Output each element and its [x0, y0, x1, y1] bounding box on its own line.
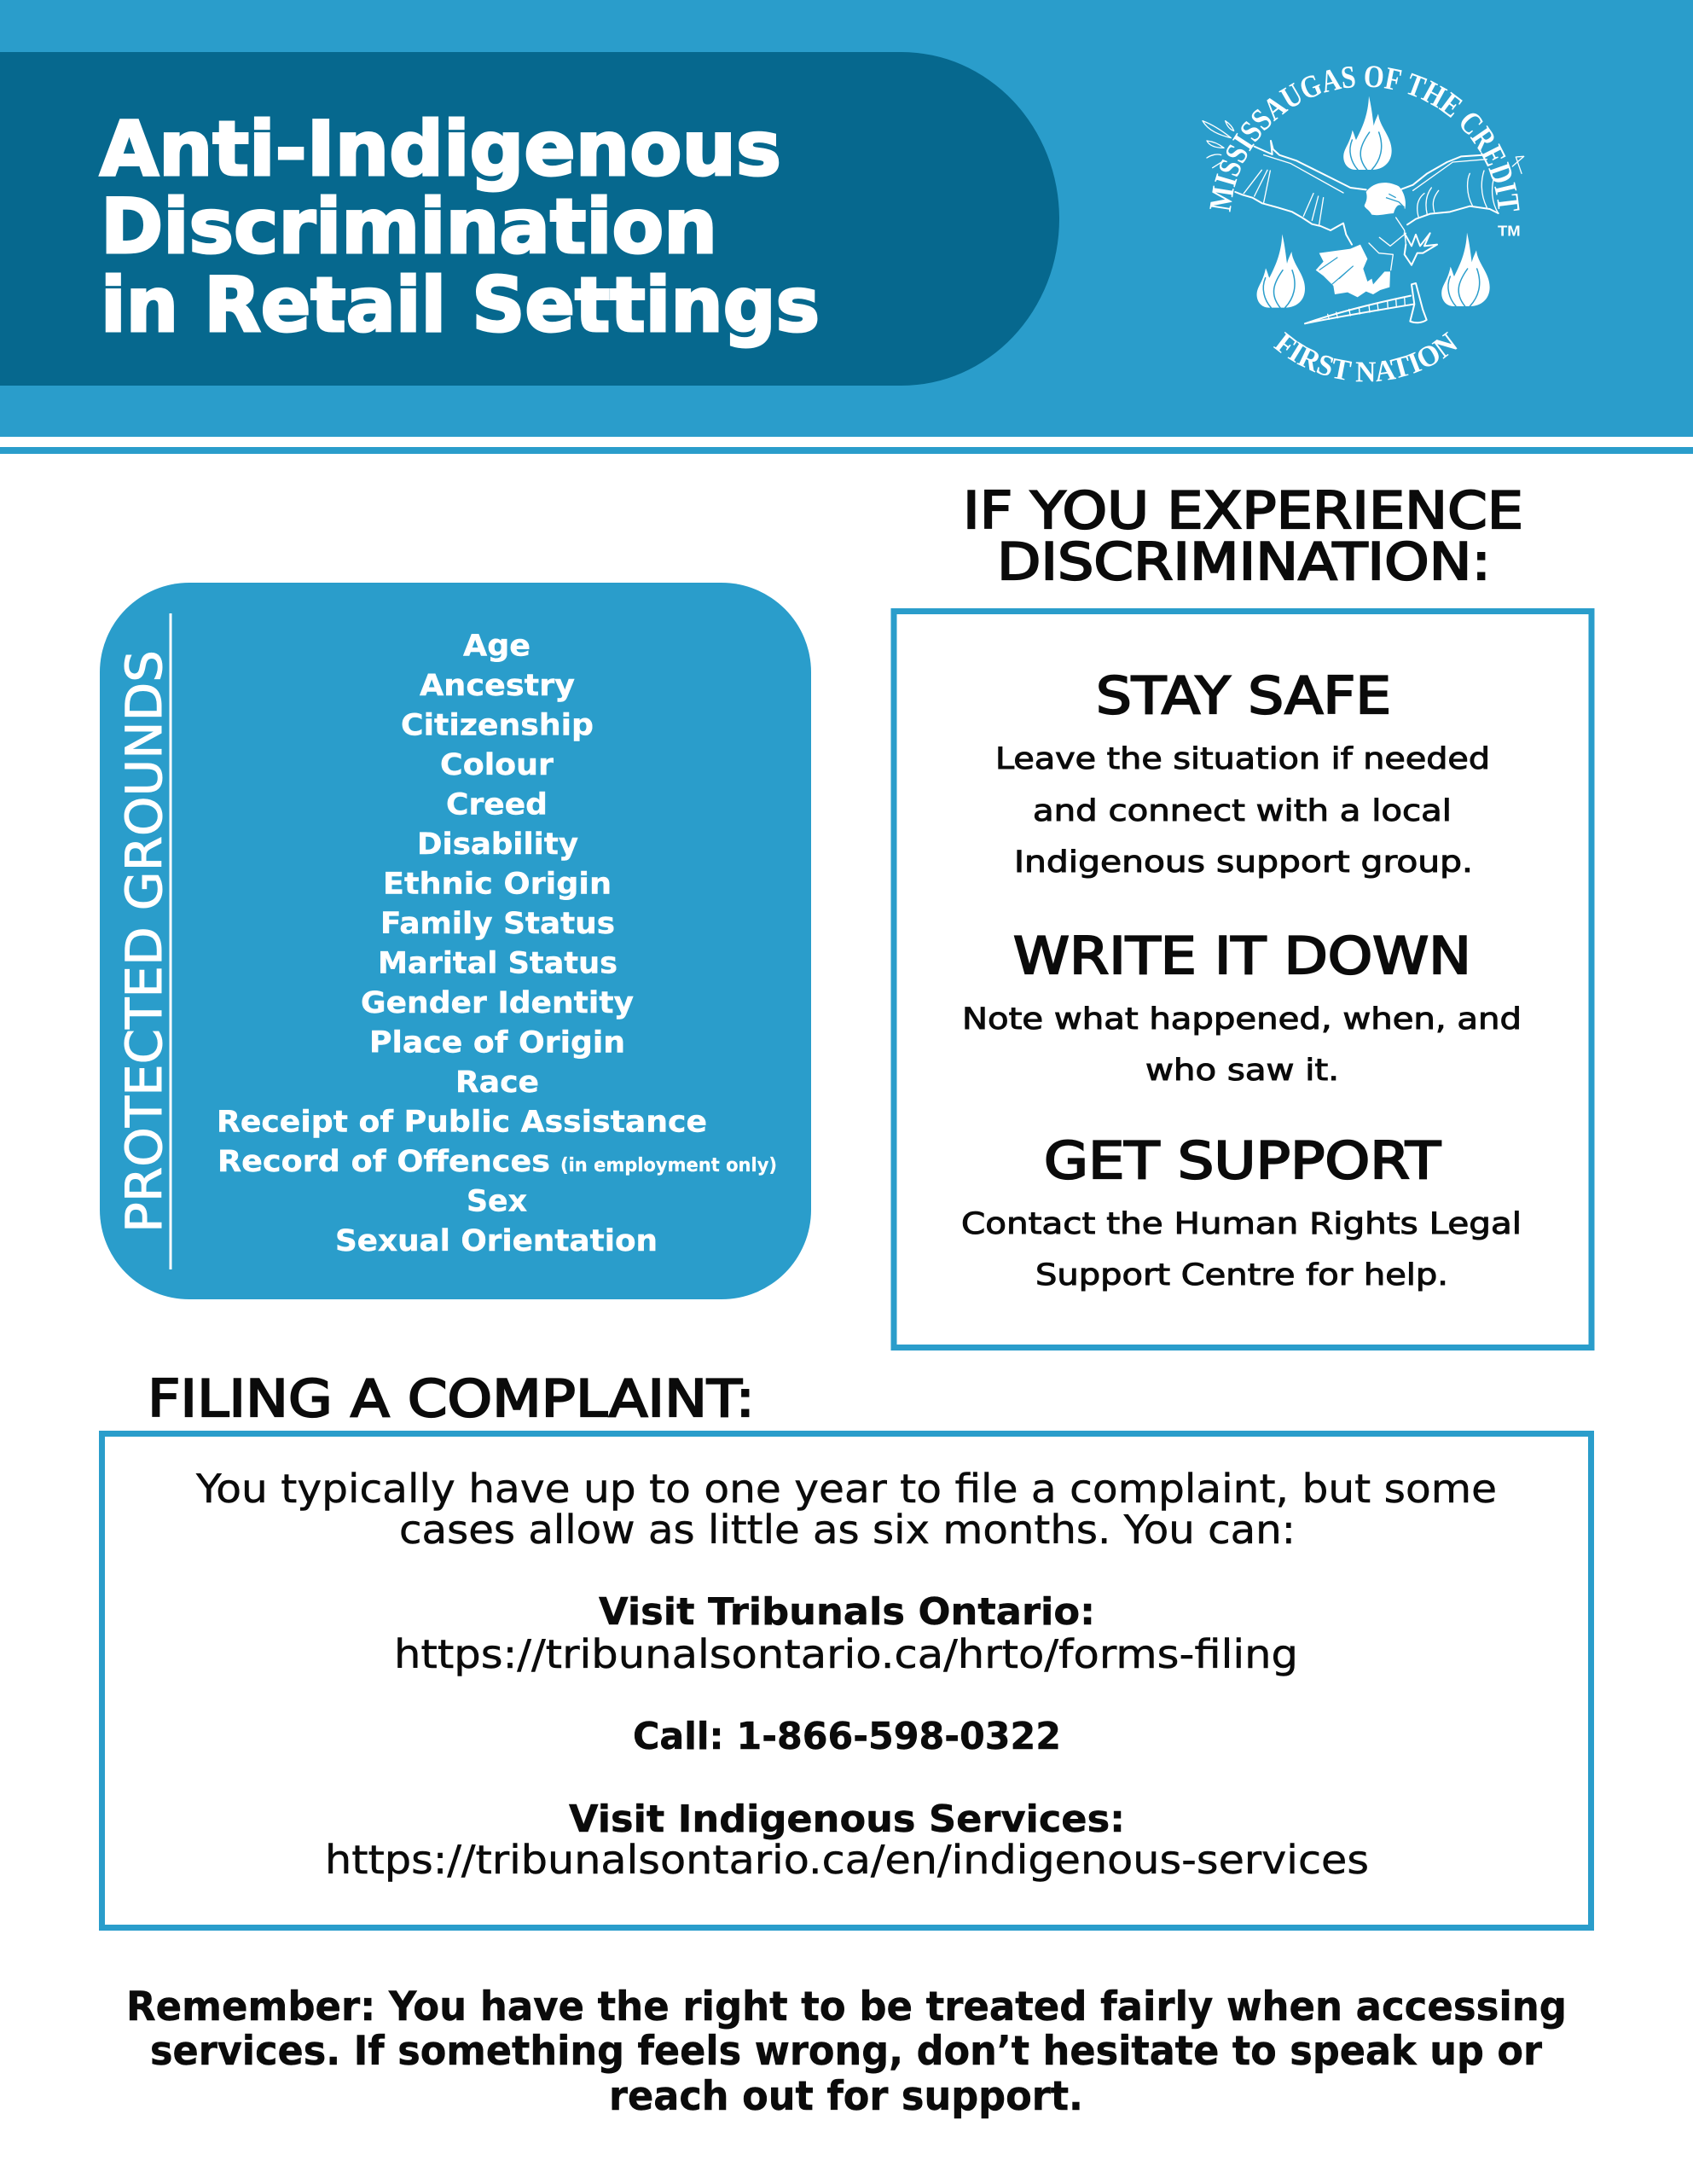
option: phone: Call: 1-866-598-0322 [633, 1715, 1061, 1758]
heading: if you experience discrimination: IF YOU EXPERIENCE [963, 481, 1523, 541]
protected grounds list: Creed [446, 788, 548, 822]
option: tribunals ontario [394, 1590, 1298, 1677]
heading: filing a complaint: FILING A COMPLAINT: [148, 1369, 755, 1429]
protected grounds list: Citizenship [401, 708, 594, 742]
option: indigenous services: https://tribunalsontario.ca/en/indigenous-services [325, 1837, 1369, 1883]
protected grounds list: Gender Identity [361, 986, 634, 1020]
heading: if you experience discrimination: DISCRIMINATION: [997, 532, 1491, 592]
protected grounds list: Receipt of Public Assistance [217, 1106, 707, 1140]
step: write it down [962, 926, 1522, 1088]
step: get support: Support Centre for help. [1035, 1258, 1448, 1292]
logo trademark: TM [1498, 223, 1521, 240]
protected grounds list: Ancestry [420, 669, 575, 703]
panel divider rule [169, 613, 172, 1269]
panel: steps if you experience discrimination [894, 611, 1592, 1348]
protected grounds list: Marital Status [378, 947, 617, 981]
protected grounds list: Disability [417, 828, 578, 862]
title: Discrimination [101, 183, 717, 270]
header band [0, 0, 1693, 454]
step: get support [961, 1131, 1522, 1292]
step: get support: GET SUPPORT [1044, 1131, 1441, 1191]
heading: if you experience discrimination [963, 481, 1523, 592]
step: stay safe: and connect with a local [1033, 794, 1452, 828]
step: write it down: Note what happened, when, and [962, 1002, 1522, 1037]
title: Anti-Indigenous [100, 105, 781, 193]
complaint time limits [195, 1466, 1497, 1553]
closing reminder [126, 1984, 1567, 2120]
logo flames [1257, 96, 1490, 308]
logo curved subtitle: FIRST NATION [1273, 331, 1457, 382]
protected grounds list: Place of Origin [369, 1025, 625, 1060]
protected grounds list: Colour [440, 748, 554, 782]
title banner [0, 52, 1059, 386]
logo eagle [1203, 121, 1524, 297]
step: write it down: WRITE IT DOWN [1013, 926, 1471, 986]
closing reminder: Remember: You have the right to be treated fairly when accessing [126, 1984, 1567, 2030]
closing reminder: services. If something feels wrong, don’t hesitate to speak up or [150, 2028, 1543, 2075]
step: write it down: who saw it. [1145, 1054, 1339, 1088]
step: get support: Contact the Human Rights Legal [961, 1207, 1522, 1241]
title [100, 105, 820, 349]
protected grounds vertical heading: PROTECTED GROUNDS [115, 650, 173, 1233]
panel: protected grounds [100, 583, 811, 1299]
complaint time limits: cases allow as little as six months. You can: [399, 1507, 1296, 1553]
protected grounds list: (in employment only) [560, 1155, 777, 1176]
logo: Mississaugas of the Credit First Nation [1202, 66, 1525, 382]
step: stay safe: Leave the situation if needed [995, 742, 1490, 776]
panel: filing a complaint [102, 1433, 1592, 1928]
protected grounds list: Record of Offences [217, 1145, 550, 1179]
complaint time limits: You typically have up to one year to file a complaint, but some [195, 1466, 1497, 1512]
protected grounds list: Sex [467, 1184, 527, 1218]
option: tribunals ontario: Visit Tribunals Ontario: [599, 1590, 1095, 1634]
option: indigenous services: Visit Indigenous Services: [569, 1798, 1125, 1841]
protected grounds list: Family Status [380, 907, 615, 941]
option: indigenous services [325, 1798, 1369, 1883]
protected grounds list [217, 630, 777, 1258]
protected grounds list: Ethnic Origin [383, 867, 612, 901]
step: stay safe [995, 666, 1490, 880]
protected grounds list: Sexual Orientation [335, 1224, 658, 1258]
step: stay safe: Indigenous support group. [1014, 845, 1473, 880]
option: tribunals ontario: https://tribunalsontario.ca/hrto/forms-filing [394, 1631, 1298, 1677]
logo curved name: MISSISSAUGAS OF THE CREDIT [1209, 66, 1520, 212]
closing reminder: reach out for support. [609, 2073, 1083, 2120]
title: in Retail Settings [101, 261, 820, 349]
protected grounds list: Age [463, 630, 531, 664]
logo tomahawk [1305, 283, 1427, 323]
protected grounds list: Race [455, 1066, 539, 1100]
step: stay safe: STAY SAFE [1096, 666, 1391, 726]
